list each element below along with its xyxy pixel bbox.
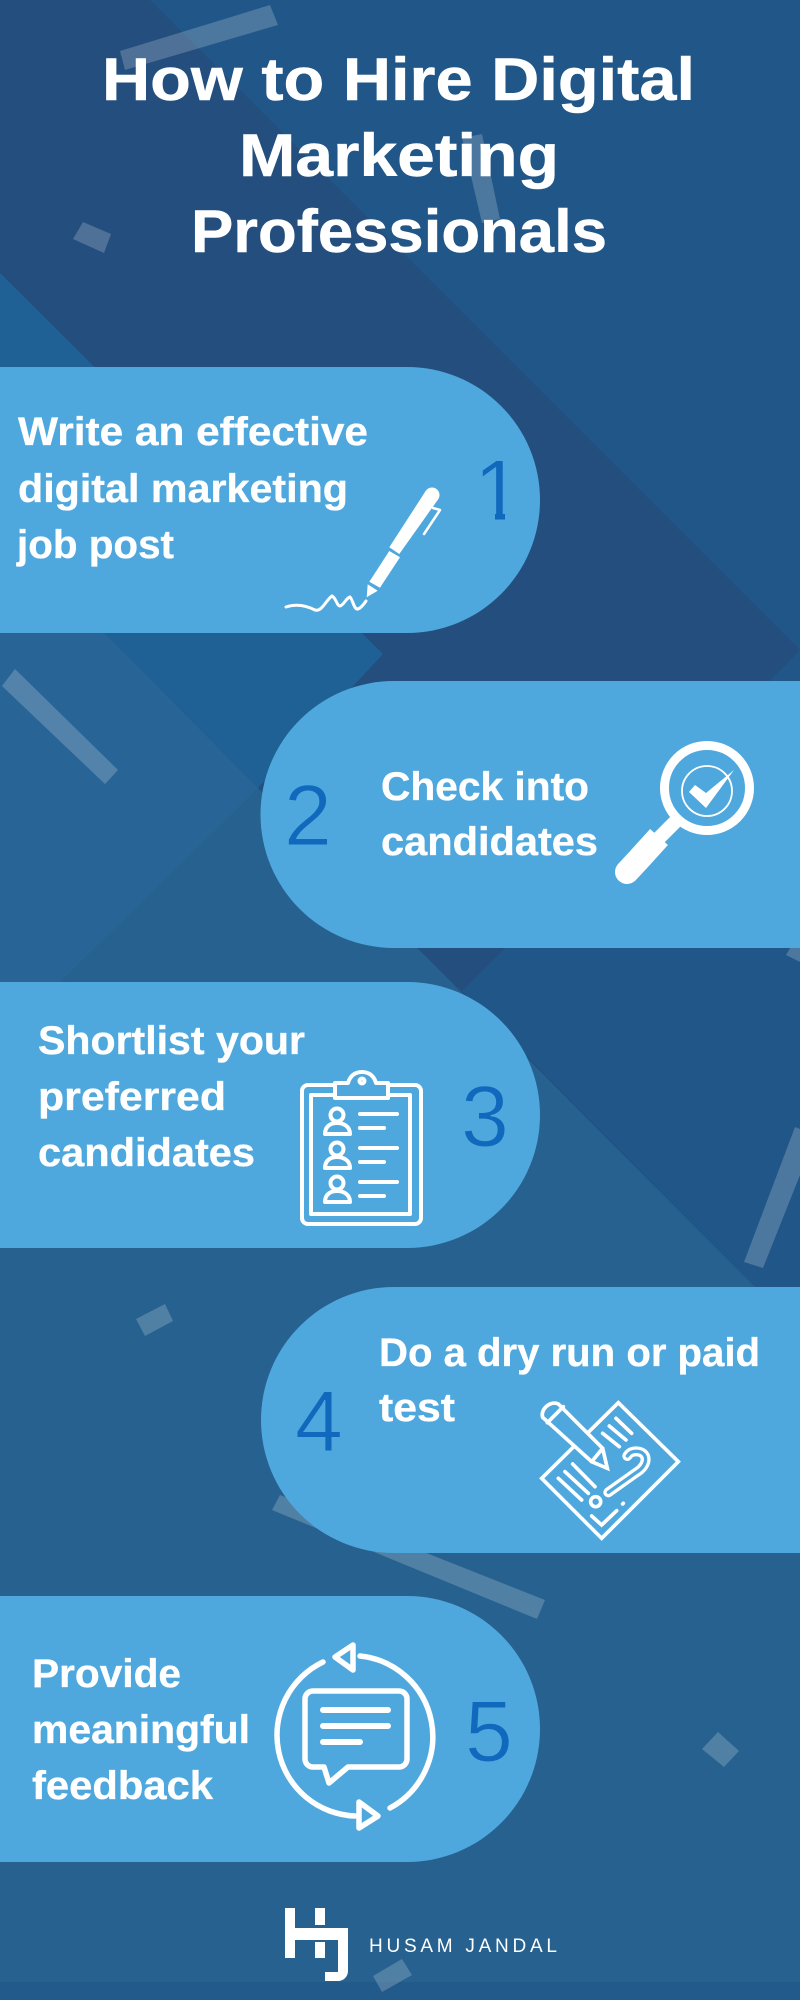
step 3 text: [38, 1019, 305, 1175]
step 2 text: candidates: [381, 820, 598, 864]
logo mark: [285, 1908, 348, 1981]
icon: clipboard with candidates: [302, 1072, 421, 1224]
step 1 number: 1: [474, 443, 522, 539]
step 3 panel: [0, 982, 540, 1248]
step 2 panel: [260, 681, 800, 948]
logo: [285, 1908, 557, 1981]
step 1 text: [16, 410, 368, 567]
step 4 panel: [261, 1287, 800, 1553]
logo wordmark: HUSAM JANDAL: [369, 1936, 557, 1957]
step 3 text: candidates: [38, 1131, 255, 1175]
icon: feedback loop with chat bubble: [277, 1645, 433, 1828]
step 4 text: test: [379, 1386, 455, 1430]
step 2 text: Check into: [381, 765, 589, 809]
title: Professionals: [191, 198, 607, 265]
title: How to Hire Digital: [102, 46, 695, 113]
step 2 number: 2: [284, 768, 332, 864]
step 5 text: feedback: [32, 1764, 214, 1808]
step 4 text: [379, 1331, 760, 1430]
step 4 text: Do a dry run or paid: [379, 1331, 760, 1375]
step 5 panel: [0, 1596, 540, 1862]
step 5 number: 5: [465, 1684, 513, 1780]
step 2 text: [381, 765, 598, 864]
step 1 panel: [0, 367, 540, 633]
step 5 text: meaningful: [32, 1708, 250, 1752]
step 5 text: [32, 1652, 250, 1808]
step 3 text: Shortlist your: [38, 1019, 305, 1063]
title: [102, 46, 695, 265]
step 3 number: 3: [461, 1069, 509, 1165]
step 1 text: digital marketing: [18, 467, 348, 511]
icon: magnifier with check: [627, 746, 750, 872]
step 5 text: Provide: [32, 1652, 181, 1696]
step 1 text: Write an effective: [18, 410, 368, 454]
step 4 number: 4: [295, 1374, 343, 1470]
step 3 text: preferred: [38, 1075, 226, 1119]
icon: pen signing: [286, 488, 440, 610]
title: Marketing: [239, 122, 559, 189]
step 1 text: job post: [16, 523, 174, 567]
icon: test paper and pencil: [542, 1403, 678, 1538]
